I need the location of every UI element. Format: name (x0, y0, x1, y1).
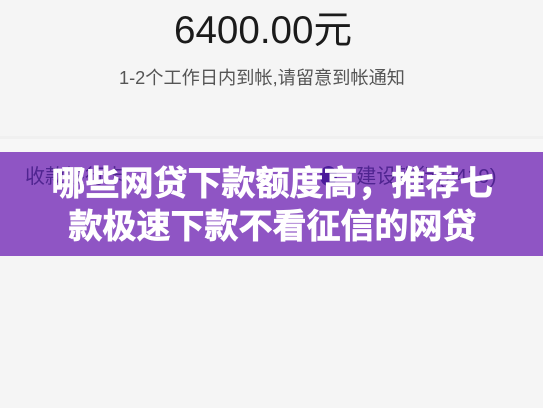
amount heading: 6400.00元 (174, 9, 352, 52)
banner title: 款极速下款不看征信的网贷 (68, 208, 476, 246)
obscured bank icon (320, 166, 337, 186)
arrival notice text: 1-2个工作日内到帐,请留意到帐通知 (119, 68, 405, 88)
obscured label: right: 建设银行(2419) (356, 166, 497, 188)
banner title: 哪些网贷下款额度高，推荐七 (52, 165, 494, 203)
banner title (52, 165, 494, 246)
payment row panel (0, 139, 543, 152)
obscured label: left: 收款银行卡 (25, 166, 125, 188)
section divider band (0, 136, 543, 139)
purple title banner (0, 152, 543, 256)
